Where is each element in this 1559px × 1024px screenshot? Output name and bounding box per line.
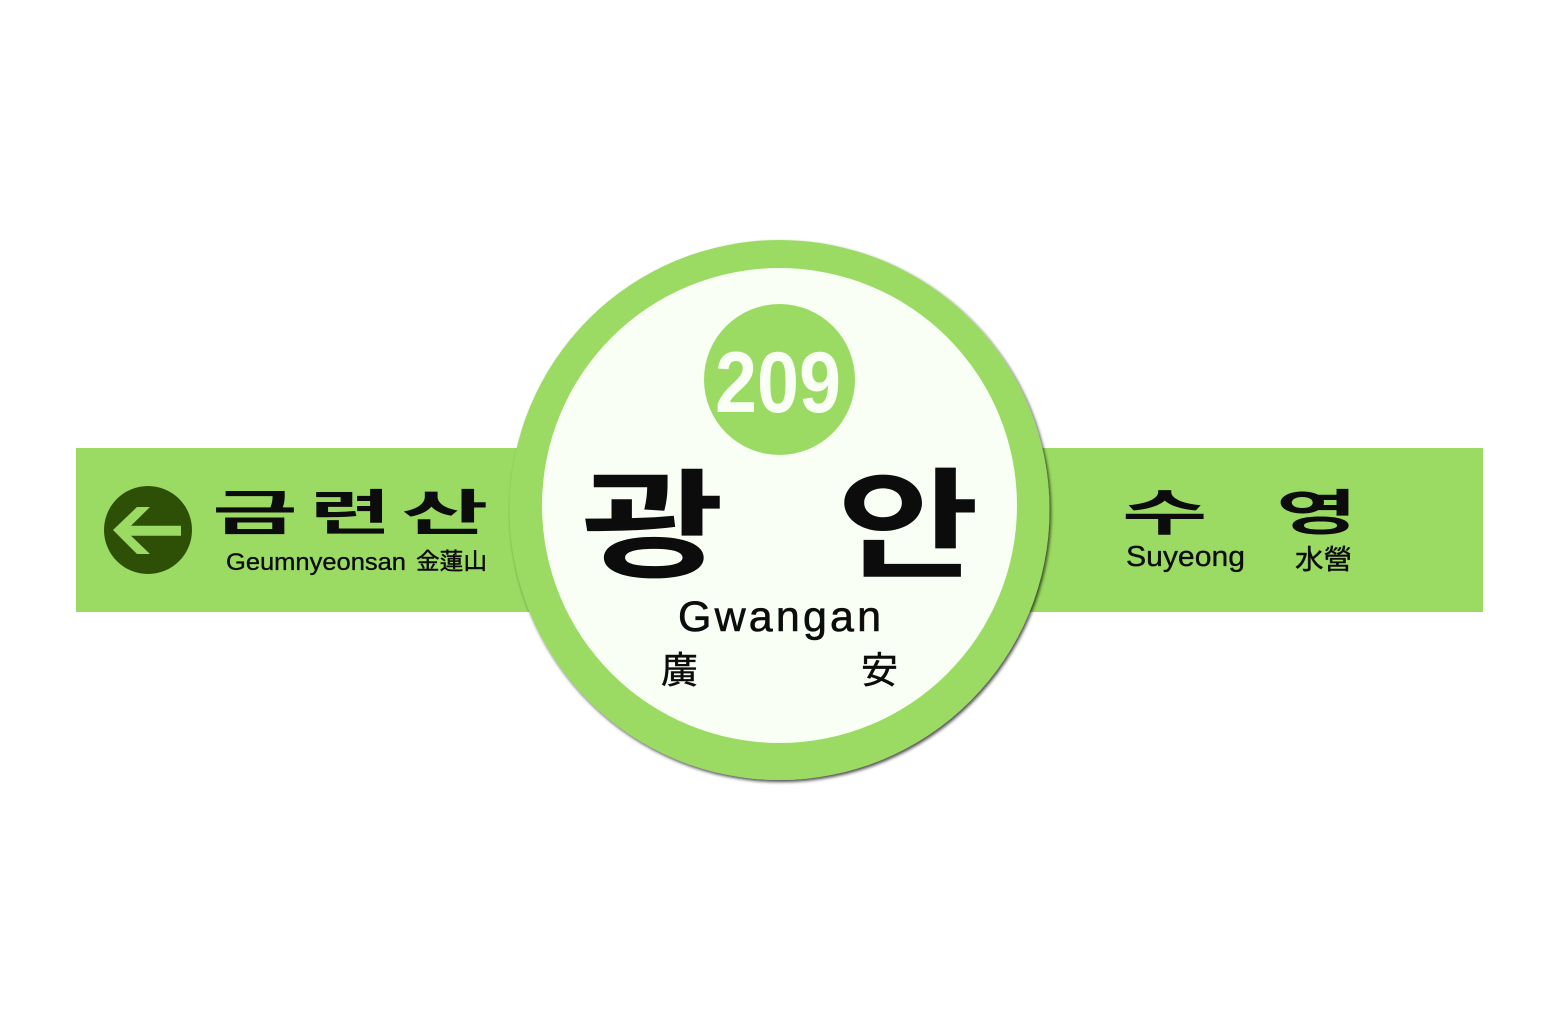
roundel outer ring <box>510 240 1050 780</box>
station Korean name <box>581 429 979 603</box>
next station Korean name: 영 <box>1276 474 1358 544</box>
station hanja <box>661 640 898 694</box>
next station hanja: 水營 <box>1295 538 1352 577</box>
previous station Korean name: 산 <box>401 474 488 544</box>
previous station Korean name: 련 <box>310 474 391 544</box>
next station romanized name: Suyeong <box>1126 541 1245 573</box>
panel: station band <box>76 448 1483 612</box>
panel: central roundel <box>510 240 1050 780</box>
icon: direction arrow <box>104 486 192 574</box>
panel: previous station Geumnyeonsan <box>104 474 488 576</box>
hanja first character: 廣 <box>661 640 698 694</box>
hanja second character: 安 <box>861 640 898 694</box>
station romanized name: Gwangan <box>678 593 881 641</box>
previous station Korean name: 금 <box>212 474 298 544</box>
panel: next station Suyeong <box>1122 474 1358 577</box>
station number badge: 209 <box>715 335 841 431</box>
next station Korean name: 수 <box>1122 474 1207 544</box>
station Korean name: 안 <box>837 429 979 603</box>
previous station hanja: 金蓮山 <box>416 542 487 576</box>
previous station Korean name <box>212 474 488 544</box>
station Korean name: 광 <box>581 431 724 602</box>
roundel inner disc <box>542 268 1017 743</box>
previous station romanized name: Geumnyeonsan <box>226 549 406 576</box>
next station Korean name <box>1122 474 1358 544</box>
station number badge <box>704 304 855 455</box>
